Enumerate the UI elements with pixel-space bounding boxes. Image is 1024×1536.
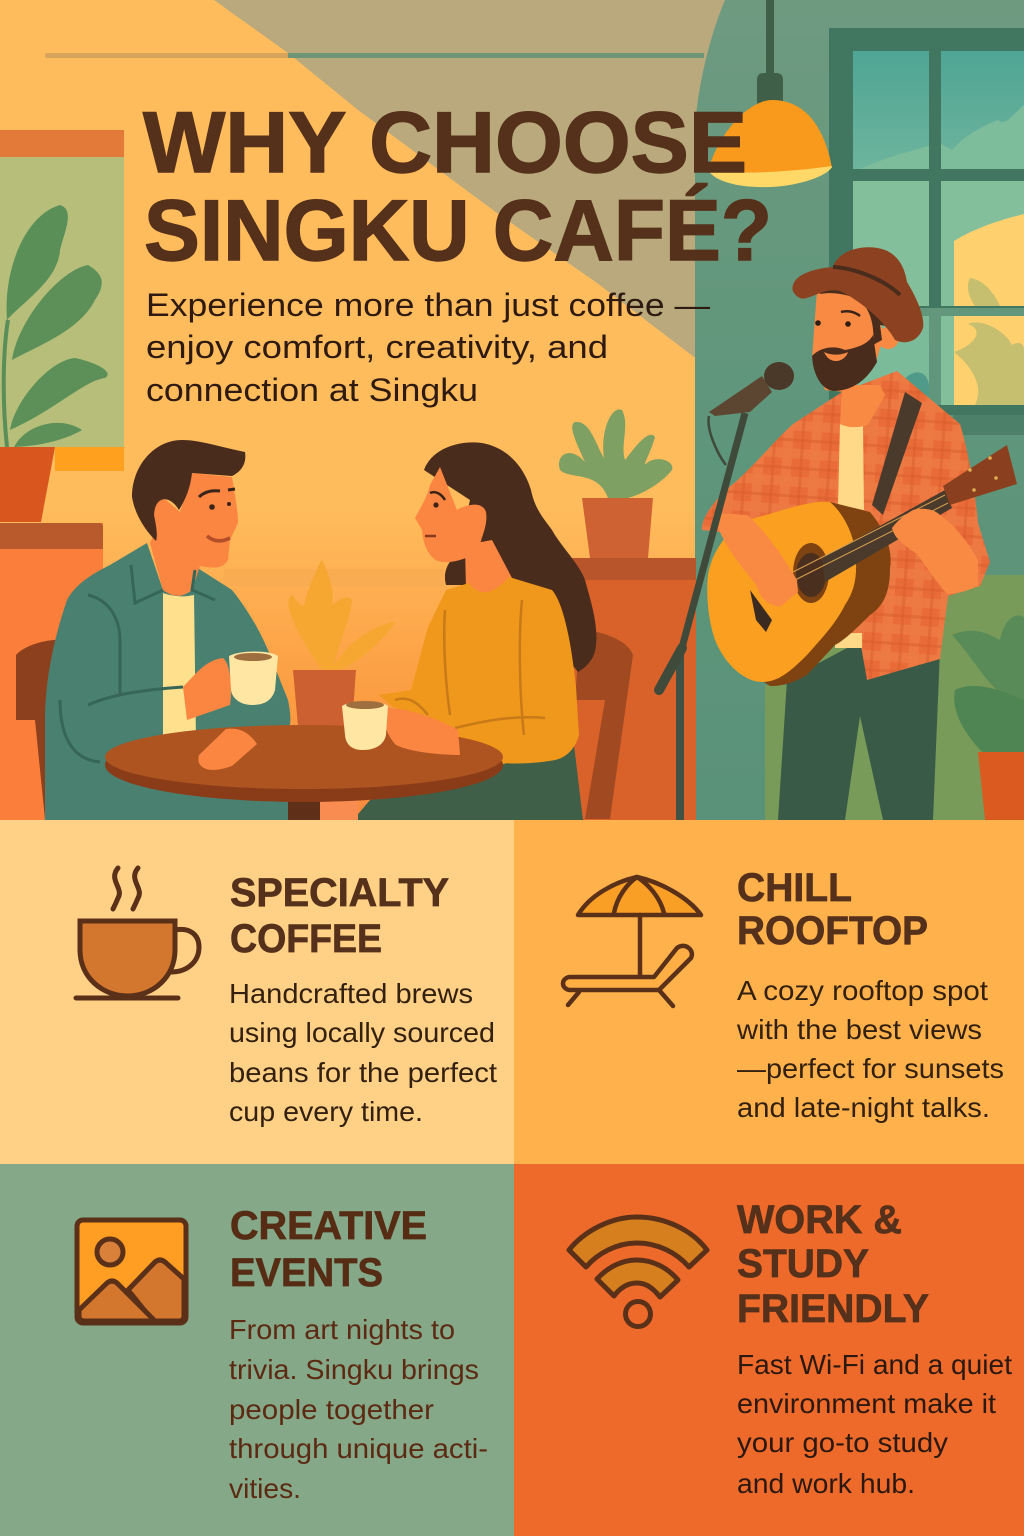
man neck and face bbox=[150, 473, 238, 596]
heading: WORK & bbox=[737, 1198, 902, 1242]
pendant lamp bbox=[708, 0, 832, 187]
body text: A cozy rooftop spot bbox=[737, 975, 988, 1006]
right chair bbox=[575, 630, 633, 819]
woman facial features bbox=[425, 492, 445, 536]
body text: with the best views bbox=[736, 1014, 982, 1045]
heading: ROOFTOP bbox=[737, 909, 928, 953]
icon: umbrella and lounger bbox=[563, 877, 701, 1006]
woman hand and mug bbox=[342, 701, 460, 755]
man hand on table bbox=[198, 729, 257, 770]
heading bbox=[737, 1198, 929, 1331]
body text: and work hub. bbox=[737, 1468, 915, 1499]
body text: Handcrafted brews bbox=[229, 978, 473, 1009]
left pot bbox=[0, 447, 55, 522]
microphone stand bbox=[659, 413, 745, 820]
body text: —perfect for sunsets bbox=[737, 1053, 1004, 1084]
body text bbox=[229, 1314, 488, 1504]
woman hair bbox=[424, 442, 596, 672]
heading bbox=[737, 866, 928, 953]
panel: work and study friendly bbox=[514, 1164, 1024, 1536]
body text: vities. bbox=[229, 1473, 301, 1504]
body text: From art nights to bbox=[229, 1314, 455, 1345]
man shirt bbox=[163, 593, 196, 740]
title: SINGKU CAFÉ? bbox=[144, 183, 772, 279]
body text: your go-to study bbox=[737, 1427, 948, 1458]
guitarist right arm bbox=[713, 514, 798, 607]
back rail bbox=[224, 569, 444, 586]
guitar strings bbox=[793, 495, 948, 580]
body text: beans for the perfect bbox=[229, 1057, 497, 1088]
man hair bbox=[132, 440, 245, 541]
right cabinet bbox=[567, 558, 696, 820]
man eye and brow bbox=[199, 489, 235, 541]
icon: picture bbox=[77, 1220, 186, 1323]
body text bbox=[737, 1349, 1012, 1499]
guitar pick guard bbox=[750, 590, 772, 632]
title: WHY CHOOSE bbox=[143, 95, 747, 191]
guitarist left hand bbox=[892, 509, 978, 594]
left wall plant bbox=[4, 205, 108, 447]
heading bbox=[230, 871, 449, 961]
guitar strap bbox=[872, 392, 922, 515]
guitarist t-shirt bbox=[835, 424, 864, 648]
guitarist bbox=[702, 247, 1017, 820]
guitarist shirt bbox=[702, 371, 990, 680]
subtitle: Experience more than just coffee — bbox=[146, 287, 710, 323]
window bbox=[829, 28, 1024, 435]
heading: STUDY bbox=[737, 1242, 869, 1286]
body text: trivia. Singku brings bbox=[229, 1354, 479, 1385]
panel: chill rooftop bbox=[514, 820, 1024, 1164]
window sill plant bbox=[559, 409, 672, 558]
hero scene background bbox=[0, 0, 1024, 820]
woman neck bbox=[465, 540, 512, 605]
woman pants bbox=[353, 745, 583, 820]
guitarist pants bbox=[778, 640, 940, 820]
guitarist neck bbox=[840, 385, 885, 427]
body text bbox=[229, 978, 497, 1127]
panel: specialty coffee bbox=[0, 820, 514, 1164]
heading: SPECIALTY bbox=[230, 871, 449, 915]
guitar headstock bbox=[943, 445, 1017, 505]
left chair bbox=[16, 640, 56, 819]
guitar body bbox=[745, 502, 891, 686]
man head bbox=[132, 440, 245, 596]
heading: CREATIVE bbox=[230, 1204, 427, 1248]
subtitle bbox=[146, 287, 710, 408]
man jacket bbox=[45, 543, 290, 820]
panel: creative events bbox=[0, 1164, 514, 1536]
guitar neck bbox=[822, 490, 952, 582]
body text: Fast Wi-Fi and a quiet bbox=[737, 1349, 1012, 1380]
body text: using locally sourced bbox=[229, 1017, 495, 1048]
heading: FRIENDLY bbox=[737, 1287, 929, 1331]
body text: cup every time. bbox=[229, 1096, 423, 1127]
heading: COFFEE bbox=[230, 917, 382, 961]
left cabinet bbox=[0, 523, 103, 820]
heading bbox=[230, 1204, 427, 1295]
body text: and late-night talks. bbox=[737, 1092, 990, 1123]
heading: EVENTS bbox=[230, 1251, 383, 1295]
guitar sound hole bbox=[793, 543, 829, 603]
title bbox=[143, 95, 772, 279]
heading: CHILL bbox=[737, 866, 852, 910]
ceiling shadow bbox=[214, 0, 730, 357]
man hand and mug bbox=[183, 652, 278, 720]
guitarist hat bbox=[792, 247, 923, 342]
woman face bbox=[415, 467, 486, 562]
body text: people together bbox=[229, 1394, 434, 1425]
table bbox=[105, 725, 503, 820]
body text bbox=[736, 975, 1004, 1123]
shelf rail bbox=[45, 53, 704, 58]
subtitle: enjoy comfort, creativity, and bbox=[146, 329, 608, 365]
left wall panel bbox=[0, 130, 124, 471]
body text: environment make it bbox=[737, 1388, 996, 1419]
icon: coffee cup bbox=[76, 868, 199, 998]
icon: wifi bbox=[569, 1217, 707, 1326]
woman bbox=[353, 442, 596, 820]
table plant bbox=[288, 560, 395, 726]
subtitle: connection at Singku bbox=[146, 372, 478, 408]
green floor bbox=[765, 575, 1024, 820]
teal wall bbox=[695, 0, 1024, 820]
man jacket lines bbox=[60, 565, 215, 762]
right floor plant bbox=[952, 615, 1024, 820]
guitarist head bbox=[792, 247, 923, 392]
microphone bbox=[709, 362, 794, 416]
body text: through unique acti- bbox=[229, 1433, 488, 1464]
woman sweater bbox=[379, 577, 579, 763]
